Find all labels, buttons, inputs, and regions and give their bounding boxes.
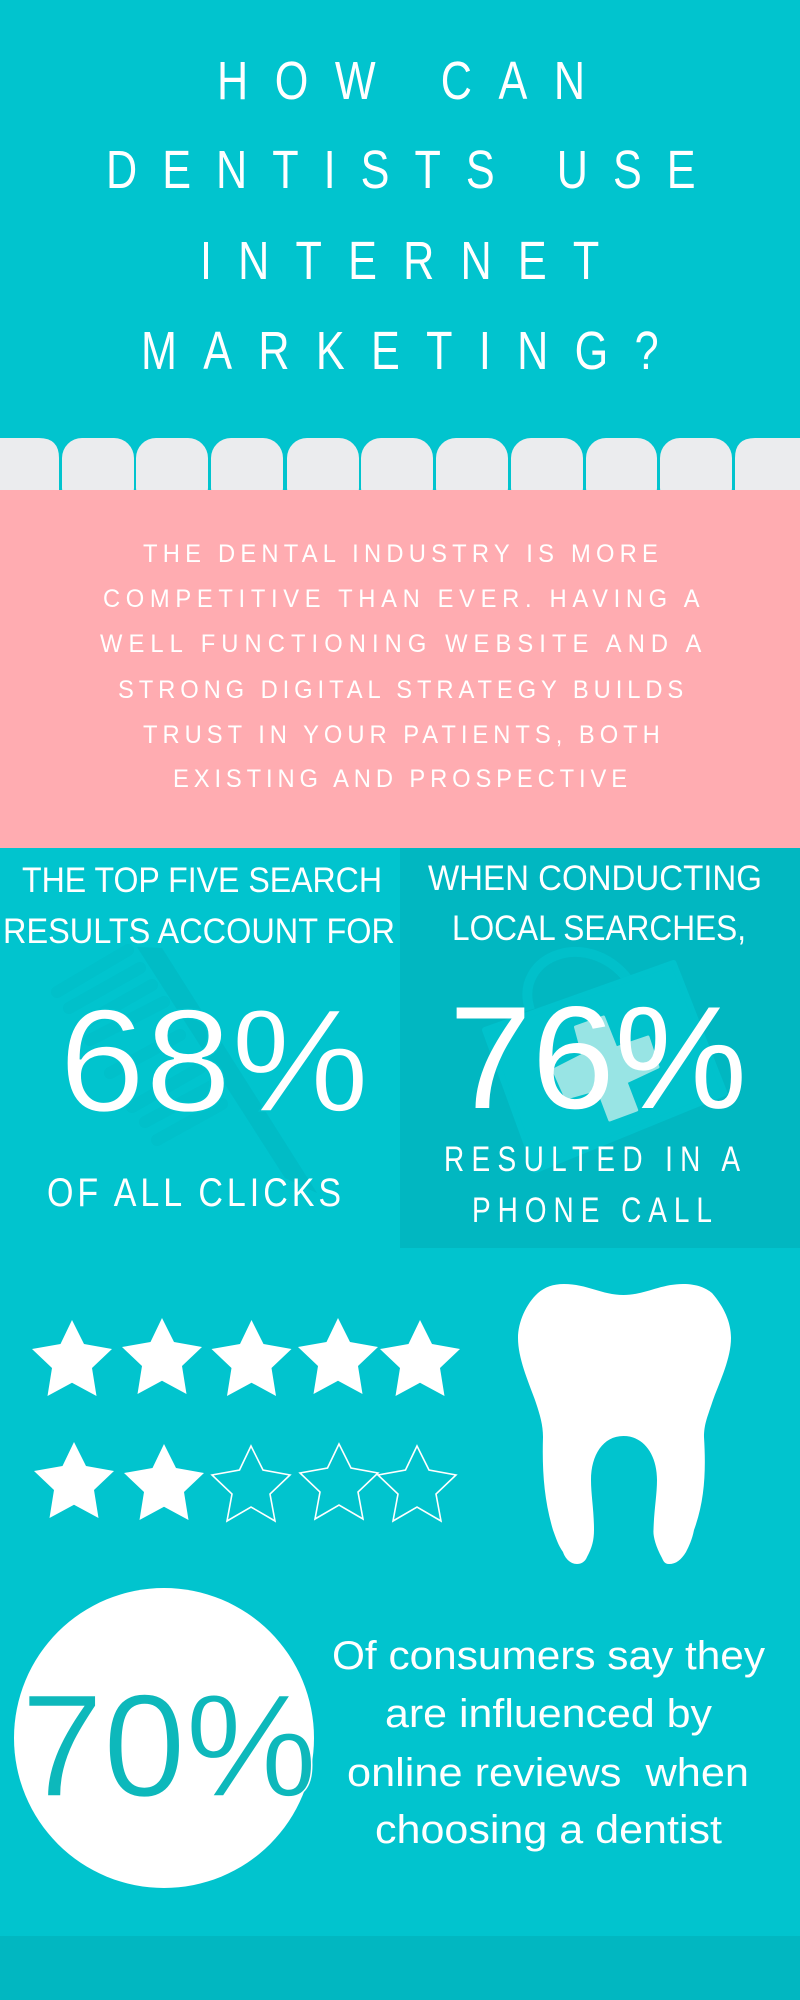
title: DENTISTS USE xyxy=(106,141,696,200)
introduction text: STRONG DIGITAL STRATEGY BUILDS xyxy=(118,676,683,704)
badge: 70% circle xyxy=(14,1588,317,1888)
introduction text: EXISTING AND PROSPECTIVE xyxy=(173,765,627,793)
panel: top five search results xyxy=(3,861,395,1215)
introduction text: WELL FUNCTIONING WEBSITE AND A xyxy=(100,630,702,658)
online reviews text: choosing a dentist xyxy=(375,1808,722,1852)
introduction text: TRUST IN YOUR PATIENTS, BOTH xyxy=(143,721,660,749)
statistic: 68%: 68% xyxy=(59,979,369,1142)
icon: toothbrush watermark xyxy=(57,947,317,1193)
introduction text: COMPETITIVE THAN EVER. HAVING A xyxy=(103,585,700,613)
title xyxy=(106,52,696,381)
five-star rating row xyxy=(32,1318,460,1396)
online reviews text: Of consumers say they xyxy=(332,1634,765,1678)
icon: tooth xyxy=(518,1284,731,1564)
two-star rating row xyxy=(34,1442,456,1521)
footer band xyxy=(0,1936,800,2000)
panel: local searches: LOCAL SEARCHES, xyxy=(452,909,746,948)
online reviews text: are influenced by xyxy=(385,1692,712,1736)
panel: top five search results: RESULTS ACCOUNT FOR xyxy=(3,912,395,951)
title: INTERNET xyxy=(200,232,599,291)
title: MARKETING? xyxy=(141,322,659,381)
online reviews text: online reviews when xyxy=(347,1751,749,1795)
introduction text xyxy=(100,540,702,793)
introduction text: THE DENTAL INDUSTRY IS MORE xyxy=(143,540,658,568)
heading text: WHEN CONDUCTING xyxy=(428,859,762,898)
badge: 70% circle: 70% xyxy=(21,1664,317,1827)
caption: RESULTED IN A xyxy=(444,1139,741,1179)
heading text: THE TOP FIVE SEARCH xyxy=(22,861,382,900)
online reviews text xyxy=(332,1634,765,1852)
row of teeth xyxy=(0,438,800,508)
panel: local searches xyxy=(400,848,800,1248)
statistic: 76%: 76% xyxy=(449,976,747,1139)
caption: OF ALL CLICKS xyxy=(47,1169,341,1215)
panel: pink introduction xyxy=(0,490,800,848)
icon: medical bag watermark xyxy=(485,952,724,1170)
title: HOW CAN xyxy=(217,52,585,111)
panel: local searches: PHONE CALL xyxy=(472,1190,712,1230)
